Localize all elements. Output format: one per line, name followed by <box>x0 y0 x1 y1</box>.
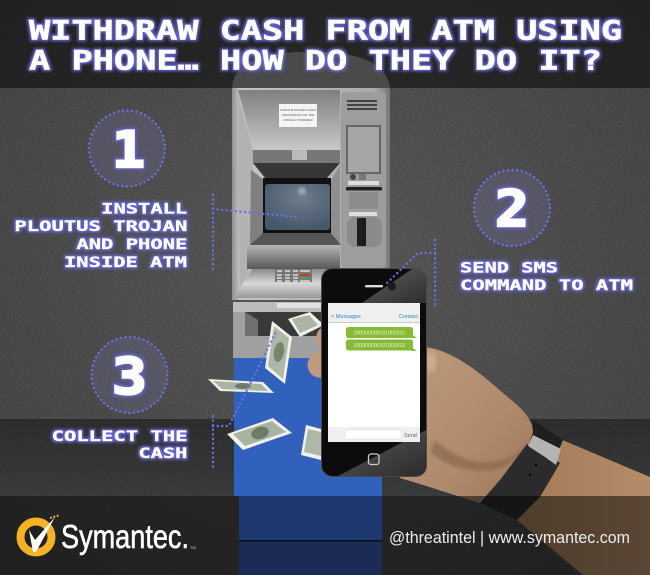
speaker <box>365 285 383 287</box>
bill: flat left <box>208 379 274 393</box>
accessibility sign: VISUALLY IMPAIRED <box>283 118 313 122</box>
strap upper <box>533 420 563 452</box>
blue base <box>234 358 382 575</box>
nav bar <box>328 303 420 323</box>
footer contact text: @threatintel | www.symantec.com <box>389 529 630 547</box>
title: A PHONE… HOW DO THEY DO IT? <box>29 46 602 76</box>
screen surround <box>250 165 341 245</box>
step 1 badge <box>89 110 165 186</box>
forearm <box>517 439 650 575</box>
bill: falling vertical <box>265 321 292 384</box>
nav bar: Contact <box>399 314 418 320</box>
connector line 2 <box>385 240 435 305</box>
nav bar: < Messages <box>331 314 361 320</box>
screen <box>263 178 331 233</box>
wordmark: Symantec. <box>61 518 189 555</box>
step 2 badge <box>474 170 550 246</box>
Symantec logo: TM <box>190 545 196 550</box>
thumb nail highlight <box>426 351 436 373</box>
step 1 text: PLOUTUS TROJAN <box>14 219 187 235</box>
step 1 text <box>14 202 188 271</box>
step 2 text <box>460 260 633 294</box>
side panel <box>341 92 386 268</box>
ledge <box>247 245 340 269</box>
hand holding phone <box>308 328 650 575</box>
step 1 text: AND PHONE <box>76 237 187 253</box>
banknotes <box>208 312 325 461</box>
SMS bubble 2: 100000000101000031 <box>354 343 406 349</box>
logo spark <box>50 515 60 518</box>
step 2 badge: 2 <box>495 180 529 238</box>
input bar: Send <box>404 433 417 439</box>
step 1 badge: 1 <box>112 121 145 179</box>
connector line 1 <box>213 195 297 272</box>
bill: behind phone <box>301 425 325 461</box>
step 2 text: SEND SMS <box>460 260 558 276</box>
step 3 text <box>52 429 188 462</box>
floor band <box>0 419 650 496</box>
Symantec logo <box>20 515 196 555</box>
ATM body <box>232 88 390 300</box>
glare top <box>362 269 426 303</box>
screen hood <box>253 150 340 179</box>
ATM machine <box>232 52 390 575</box>
watch <box>480 420 563 520</box>
home button <box>368 454 379 464</box>
keypad shelf <box>233 269 340 298</box>
SMS bubble 1: 100000000101000031 <box>354 330 406 336</box>
camera <box>388 282 396 290</box>
thumb crease shadow <box>430 440 528 471</box>
step 2 text: COMMAND TO ATM <box>460 278 633 294</box>
ATM top arch <box>232 52 390 90</box>
title <box>29 16 622 76</box>
footer band <box>0 496 650 575</box>
step 3 badge: 3 <box>112 348 147 406</box>
step 3 text: COLLECT THE <box>52 429 188 445</box>
phone screen <box>328 303 420 442</box>
glare bottom <box>338 430 426 476</box>
strap <box>480 444 560 520</box>
logo check mark <box>29 517 55 552</box>
step 1 text: INSTALL <box>101 202 188 218</box>
upper recess <box>238 90 340 150</box>
logo ring <box>20 522 52 552</box>
cash dispenser <box>233 302 323 358</box>
step 3 badge <box>92 337 168 413</box>
card reader <box>347 217 382 247</box>
fingers <box>308 328 324 378</box>
title: WITHDRAW CASH FROM ATM USING <box>29 16 622 46</box>
bill: upper right <box>288 312 324 337</box>
phone body <box>322 268 426 476</box>
header band <box>0 0 650 88</box>
accessibility sign <box>279 104 317 127</box>
palm and thumb <box>400 345 533 503</box>
accessibility sign: ASSISTANCE FOR THE <box>282 113 314 117</box>
metal buckle <box>528 435 561 465</box>
step 1 text: INSIDE ATM <box>64 255 187 271</box>
accessibility sign: THIS ATM OFFERS AUDIO <box>280 108 317 112</box>
step 3 text: CASH <box>138 446 187 462</box>
connector line 3 <box>213 330 277 470</box>
bill: lower <box>227 418 292 450</box>
smartphone <box>322 268 426 476</box>
